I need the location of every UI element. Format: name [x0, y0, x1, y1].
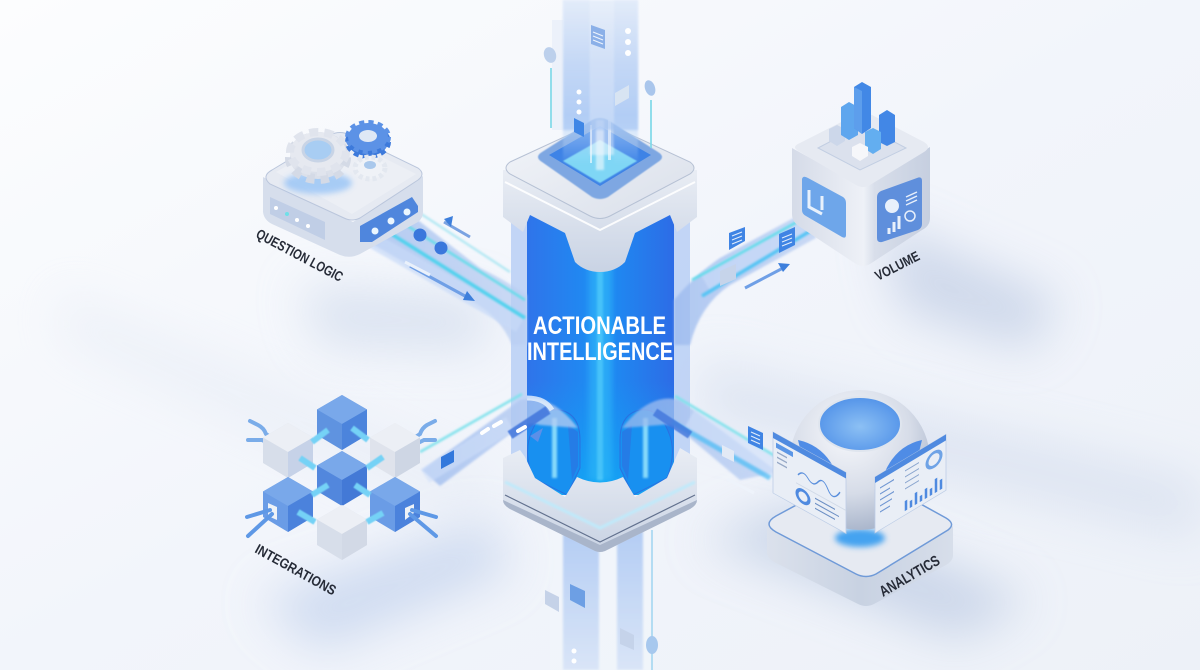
central label — [527, 312, 673, 366]
arch cut-out left — [528, 410, 580, 495]
label: integrations: INTEGRATIONS — [253, 541, 339, 598]
tentacles back — [248, 421, 435, 444]
right icon plate — [877, 177, 922, 242]
label: volume: VOLUME — [872, 248, 922, 284]
left port — [802, 177, 846, 238]
gear small — [355, 157, 385, 179]
top data beam — [542, 0, 657, 165]
pipe: top right — [674, 208, 832, 345]
cap side with notched apron — [503, 170, 697, 272]
base — [503, 448, 697, 552]
cube middle — [317, 451, 367, 506]
central column — [503, 118, 697, 552]
label: analytics: ANALYTICS — [876, 552, 943, 600]
module: question logic — [254, 123, 423, 285]
column glass shell — [511, 210, 690, 480]
module: volume — [792, 82, 930, 284]
connectors — [298, 428, 383, 522]
pipe: bottom right — [622, 396, 780, 493]
cube right grey — [370, 423, 420, 478]
cube lower right — [370, 477, 420, 532]
cube top — [317, 395, 367, 450]
arch cut-out right — [620, 410, 672, 495]
cube left grey — [263, 423, 313, 478]
right dashboard panel — [875, 434, 946, 533]
bars — [829, 82, 895, 161]
sphere — [790, 390, 930, 530]
server box — [263, 176, 423, 257]
gear blue — [348, 123, 388, 156]
tentacles front — [247, 510, 436, 536]
cap top surface — [506, 123, 694, 218]
gear large — [290, 132, 346, 179]
module: integrations — [247, 395, 436, 598]
central label: INTELLIGENCE — [527, 338, 673, 366]
central label: ACTIONABLE — [533, 312, 666, 340]
pipe: bottom left — [420, 394, 578, 486]
cube lower left — [263, 477, 313, 532]
blue core panel — [527, 210, 674, 495]
indicator panel — [270, 197, 325, 240]
pipe: top left — [372, 208, 527, 345]
cap socket — [538, 118, 662, 199]
cube body — [792, 147, 930, 266]
glow ring — [835, 529, 885, 547]
cube bottom grey — [317, 505, 367, 560]
bottom data beam — [545, 530, 658, 670]
module: analytics — [767, 390, 953, 606]
base plinth — [767, 525, 953, 606]
label: question logic: QUESTION LOGIC — [254, 226, 346, 285]
connector plate — [360, 197, 418, 242]
left dashboard panel — [773, 432, 846, 533]
